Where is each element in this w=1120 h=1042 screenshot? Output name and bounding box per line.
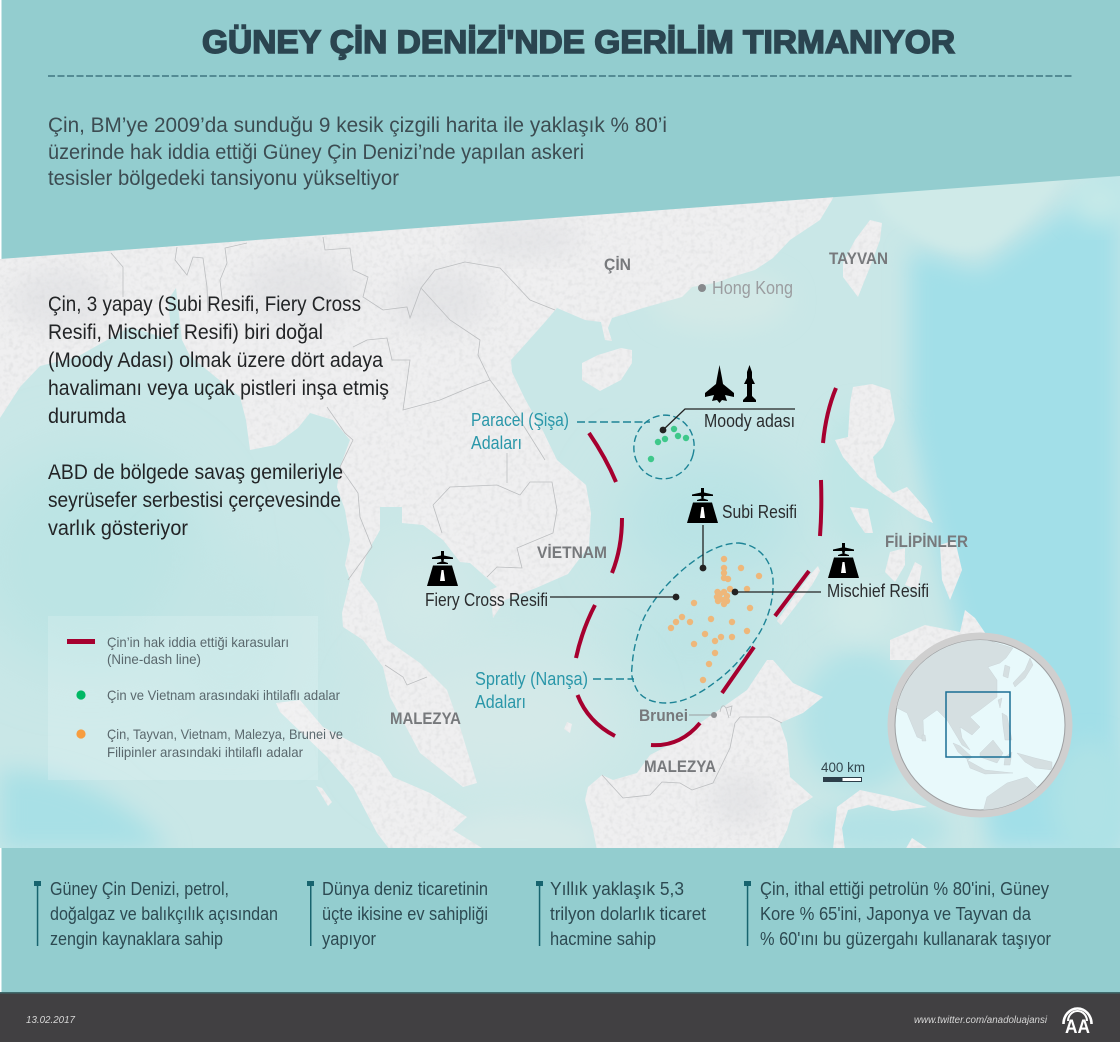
side text: airstrips: Resifi, Mischief Resifi) biri doğal [48, 321, 323, 344]
land: Philippine islands [850, 507, 990, 660]
scale bar: 400 km [821, 759, 865, 775]
callout: Mischief Reef: Mischief Resifi [827, 581, 929, 601]
side text: airstrips: durumda [48, 405, 126, 428]
side text: airstrips: Çin, 3 yapay (Subi Resifi, Fiery Cross [48, 293, 361, 316]
side text: US ships [48, 461, 343, 540]
side text: airstrips: havalimanı veya uçak pistleri inşa etmiş [48, 377, 389, 400]
legend: Çin’in hak iddia ettiği karasuları [107, 634, 289, 650]
intro text: Çin, BM’ye 2009’da sunduğu 9 kesik çizgili harita ile yaklaşık % 80’i [48, 114, 667, 137]
footer bar [0, 992, 1120, 1042]
country labels: TAYVAN [829, 249, 888, 268]
country labels: FİLİPİNLER [885, 532, 968, 551]
icon: fighter jet [705, 365, 734, 403]
mountain shading [10, 222, 770, 825]
callout: Moody island [660, 409, 795, 433]
land: Sumatra [276, 700, 482, 850]
fact: sea trade: yapıyor [322, 928, 376, 949]
fact: resources [34, 878, 278, 949]
Brunei label: Brunei [639, 706, 688, 725]
side text: airstrips [48, 293, 389, 428]
country labels: MALEZYA [644, 757, 716, 776]
fact: sea trade: Dünya deniz ticaretinin [322, 878, 488, 899]
side text: airstrips: (Moody Adası) olmak üzere dört adaya [48, 349, 383, 372]
Spratly islands: Adaları [475, 692, 526, 712]
title: GÜNEY ÇİN DENİZİ'NDE GERİLİM TIRMANIYOR [202, 24, 955, 60]
legend: Çin ve Vietnam arasındaki ihtilaflı adalar [107, 687, 340, 703]
callout: Fiery Cross Reef [425, 590, 679, 610]
side text: US ships: varlık gösteriyor [48, 517, 188, 540]
footer bar: www.twitter.com/anadoluajansi [914, 1015, 1048, 1026]
country labels [390, 249, 968, 776]
scale bar [821, 759, 865, 782]
callout: Moody island: Moody adası [704, 411, 795, 431]
land: mainland Asia [0, 170, 845, 787]
icon: runway Fiery Cross [427, 551, 458, 586]
callout: Mischief Reef [732, 581, 929, 601]
land: small islands [316, 722, 572, 806]
fact: resources: Güney Çin Denizi, petrol, [50, 878, 229, 899]
fact: sea trade [307, 878, 488, 949]
land: Luzon [835, 384, 933, 523]
legend [48, 616, 343, 780]
logo: Anadolu Agency: AA [1065, 1017, 1090, 1038]
side text: US ships: ABD de bölgede savaş gemileriyle [48, 461, 343, 484]
Brunei label [639, 706, 717, 725]
fact: resources: zengin kaynaklara sahip [50, 928, 223, 949]
fact: trade volume: hacmine sahip [550, 928, 656, 949]
callout: Subi Reef: Subi Resifi [722, 502, 797, 522]
fact: oil shipping [744, 878, 1051, 949]
intro text [48, 114, 667, 190]
inset globe [880, 632, 1072, 818]
fact: resources: doğalgaz ve balıkçılık açısından [50, 903, 278, 924]
callout: Subi Reef [700, 502, 797, 571]
icon: runway Subi [687, 488, 718, 523]
callout: Fiery Cross Reef: Fiery Cross Resifi [425, 590, 548, 610]
legend: Filipinler arasındaki ihtilaflı adalar [107, 744, 303, 760]
fact: trade volume [536, 878, 706, 949]
intro text: tesisler bölgedeki tansiyonu yükseltiyor [48, 167, 399, 190]
fact: sea trade: üçte ikisine ev sahipliği [322, 903, 488, 924]
fact: oil shipping: % 60'ını bu güzergahı kullanarak taşıyor [760, 928, 1051, 949]
borders [111, 237, 782, 798]
Paracel islands [471, 408, 701, 486]
logo: Anadolu Agency [1064, 1008, 1092, 1038]
fact: trade volume: trilyon dolarlık ticaret [550, 903, 706, 924]
land: Palawan [777, 566, 820, 625]
icon: runway Mischief [828, 543, 859, 578]
bottom panel [0, 848, 1120, 993]
fact: oil shipping: Kore % 65'ini, Japonya ve Tayvan da [760, 903, 1032, 924]
ocean depth shading [0, 165, 1120, 870]
country labels: MALEZYA [390, 709, 461, 728]
land: Sulawesi [833, 790, 930, 850]
legend: Çin, Tayvan, Vietnam, Malezya, Brunei ve [107, 726, 343, 742]
nine-dash line [576, 388, 836, 745]
legend: (Nine-dash line) [107, 651, 201, 667]
land: Borneo [585, 660, 823, 850]
Paracel islands: Adaları [471, 433, 522, 453]
Paracel islands: Paracel (Şişa) [471, 410, 569, 430]
land: Taiwan [843, 220, 882, 297]
top banner [0, 0, 1120, 259]
fact: trade volume: Yıllık yaklaşık 5,3 [550, 878, 684, 899]
land masses [0, 170, 990, 850]
Spratly islands [475, 543, 773, 712]
footer bar: 13.02.2017 [26, 1015, 75, 1026]
country labels: VİETNAM [537, 543, 607, 562]
land: Hainan [582, 348, 632, 391]
country labels: ÇİN [604, 255, 631, 274]
side text: US ships: seyrüsefer serbestisi çerçevesinde [48, 489, 341, 512]
Spratly islands: Spratly (Nanşa) [475, 669, 588, 689]
map background [0, 165, 1120, 870]
fact: oil shipping: Çin, ithal ettiği petrolün % 80'ini, Güney [760, 878, 1050, 899]
Hong Kong label: Hong Kong [712, 278, 793, 298]
icon: missile [743, 365, 756, 402]
intro text: üzerinde hak iddia ettiği Güney Çin Denizi’nde yapılan askeri [48, 141, 584, 164]
